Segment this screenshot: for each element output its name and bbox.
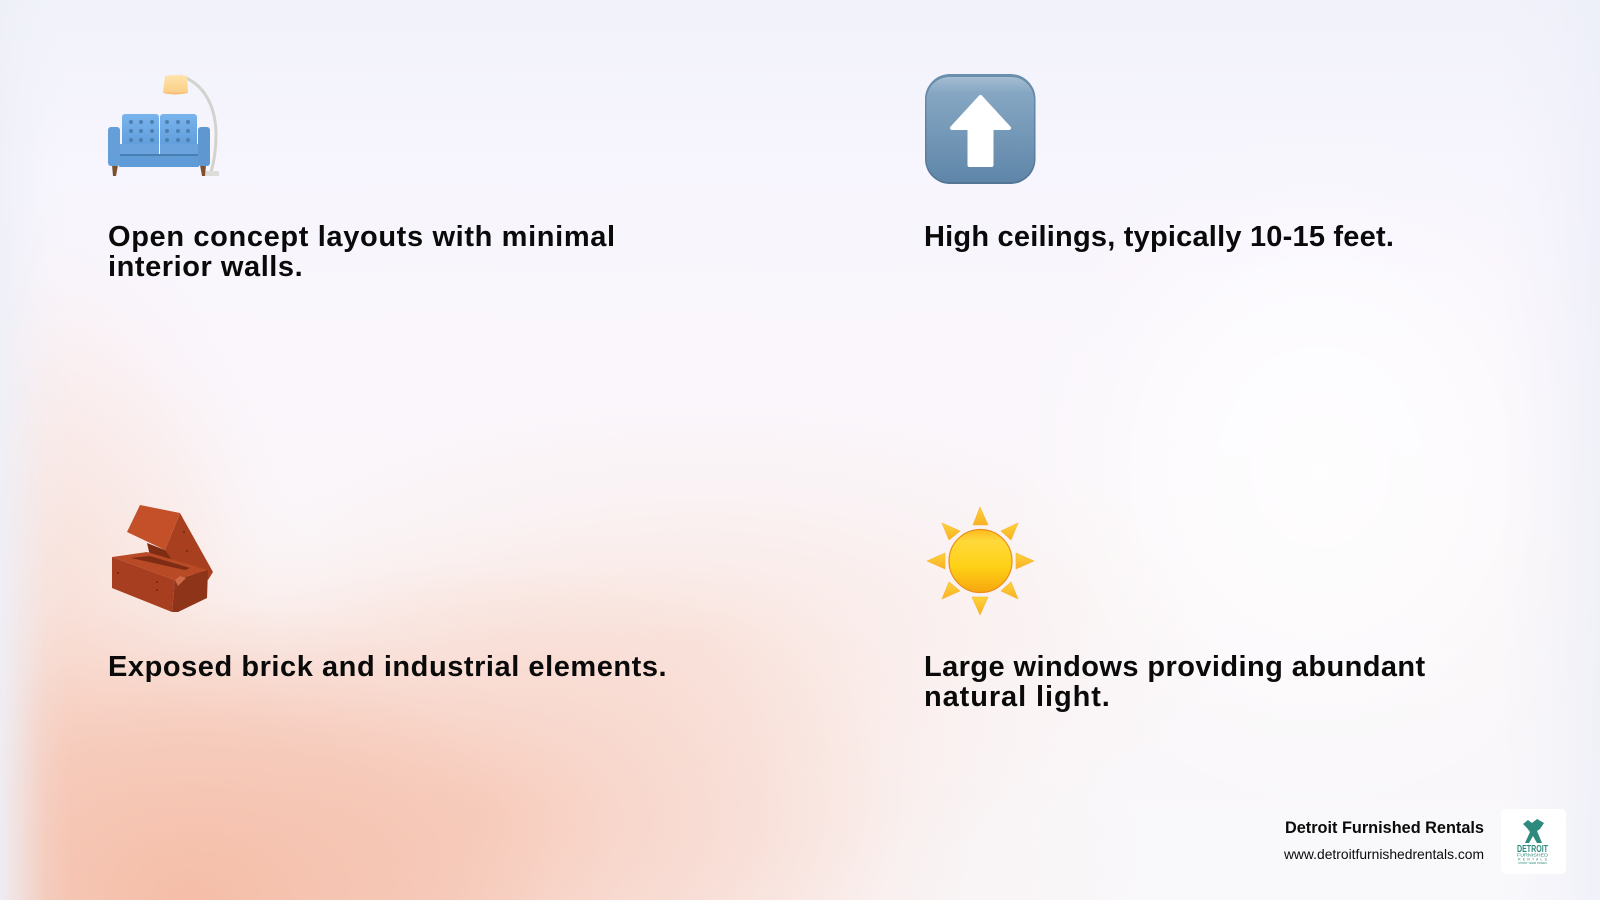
heading: high ceilings: High ceilings, typically 10-15 feet. bbox=[924, 221, 1394, 253]
icon: up arrow button bbox=[925, 74, 1036, 184]
logo mark bbox=[1517, 819, 1549, 865]
heading: open concept: interior walls. bbox=[108, 251, 303, 283]
heading: open concept: Open concept layouts with minimal bbox=[108, 221, 616, 253]
logo mark: FURNISHED bbox=[1517, 852, 1549, 858]
logo card bbox=[1501, 809, 1566, 874]
icon: sun bbox=[926, 506, 1034, 616]
logo mark: DETROIT bbox=[1517, 844, 1548, 855]
icon: sofa and floor lamp bbox=[108, 74, 219, 176]
brand block bbox=[1284, 809, 1566, 874]
heading: large windows: natural light. bbox=[924, 681, 1111, 713]
logo mark: RENTALS bbox=[1518, 858, 1548, 862]
icon: bricks bbox=[112, 505, 213, 612]
heading: large windows: Large windows providing abundant bbox=[924, 651, 1426, 683]
brand url: www.detroitfurnishedrentals.com bbox=[1284, 846, 1484, 862]
brand name: Detroit Furnished Rentals bbox=[1285, 819, 1484, 837]
heading: large windows bbox=[924, 651, 1426, 713]
logo mark: SHORT TERM HOMES bbox=[1518, 862, 1547, 865]
heading: exposed brick: Exposed brick and industrial elements. bbox=[108, 651, 667, 683]
heading: open concept bbox=[108, 221, 616, 283]
